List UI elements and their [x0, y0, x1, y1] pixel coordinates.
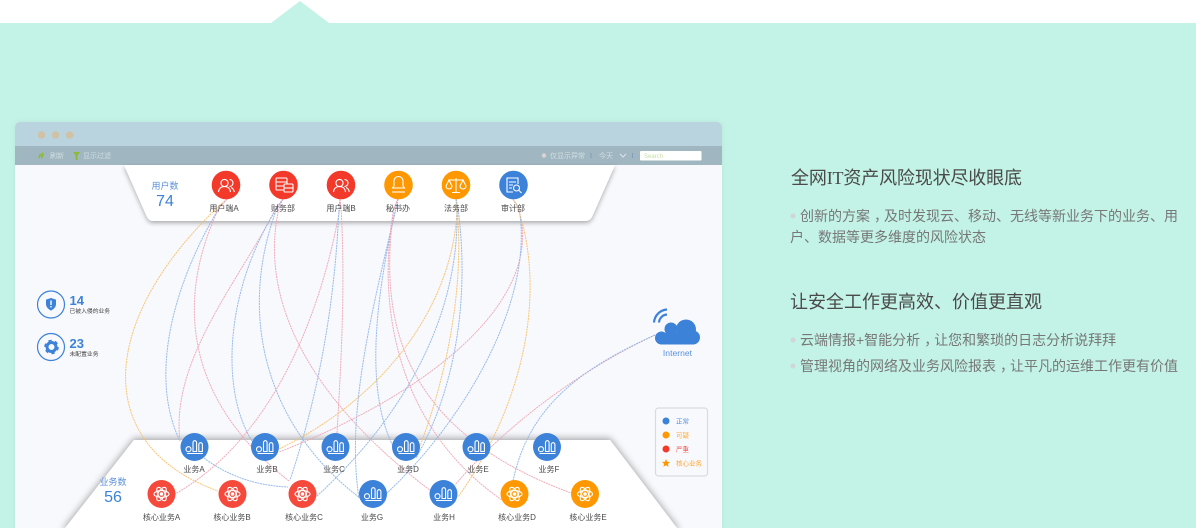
node: 核心业务E: [569, 480, 607, 522]
node: 业务D: 业务D: [397, 464, 419, 474]
node: 业务A: 业务A: [183, 464, 205, 474]
text block: visibility description: [790, 208, 1178, 245]
node: 业务F: 业务F: [539, 464, 560, 474]
window toolbar: [15, 146, 722, 165]
node: 核心业务A: 核心业务A: [143, 512, 181, 522]
heading: full-network visibility: 全网IT资产风险现状尽收眼底: [791, 168, 1022, 188]
icon: internet cloud: [654, 310, 700, 358]
node: 秘书办: [384, 171, 413, 213]
node: 业务A: [180, 433, 208, 474]
node: 法务部: [442, 171, 470, 213]
node: 业务B: [251, 433, 279, 474]
node: 秘书办: 秘书办: [386, 203, 410, 213]
node: 业务C: 业务C: [323, 464, 345, 474]
stat: unconfigured businesses: [38, 334, 99, 360]
node: 业务F: [533, 433, 561, 474]
legend: 正常: [676, 416, 689, 426]
node: 业务G: 业务G: [361, 512, 383, 522]
business count: [99, 476, 127, 506]
business count: 56: [104, 489, 122, 506]
node: 核心业务C: 核心业务C: [285, 512, 323, 522]
node: 核心业务A: [143, 480, 181, 522]
node: 用户端B: 用户端B: [326, 203, 356, 213]
text block: visibility description: 创新的方案 ，及时发现云、移动、无线等新业务下的业务、用: [800, 208, 1178, 224]
panel: user departments: [124, 165, 615, 221]
toolbar right actions: [542, 151, 702, 160]
stat: compromised businesses: 已被入侵的业务: [70, 307, 110, 315]
toolbar left actions: 显示过滤: [83, 151, 111, 160]
legend: [656, 408, 708, 476]
node: 核心业务B: 核心业务B: [213, 512, 251, 522]
node: 业务C: [322, 433, 350, 474]
text block: visibility description: 户、数据等更多维度的风险状态: [790, 229, 986, 245]
heading: efficiency and value: 让安全工作更高效、价值更直观: [790, 292, 1042, 312]
user count: [151, 180, 179, 210]
node: 审计部: 审计部: [501, 203, 525, 213]
node: 业务E: [462, 433, 490, 474]
node: 核心业务C: [285, 480, 323, 522]
node: 审计部: [499, 171, 528, 213]
stat: unconfigured businesses: 23: [70, 336, 84, 351]
node: 业务E: 业务E: [467, 464, 489, 474]
toolbar left actions: 刷新: [50, 151, 64, 160]
node: 业务H: 业务H: [433, 512, 455, 522]
stat: unconfigured businesses: 未配置业务: [70, 350, 99, 358]
icon: internet cloud: Internet: [663, 348, 693, 358]
node: 业务B: 业务B: [256, 464, 278, 474]
connection lines: [126, 199, 655, 500]
node: 核心业务D: 核心业务D: [498, 512, 536, 522]
user count: 用户数: [151, 180, 179, 191]
text block: efficiency bullets: 云端情报+智能分析 ，让您和繁琐的日志分析说拜拜: [800, 332, 1116, 348]
node: 用户端A: [209, 171, 240, 213]
node: 用户端A: 用户端A: [209, 203, 239, 213]
business count: 业务数: [99, 476, 127, 487]
node: 法务部: 法务部: [444, 203, 468, 213]
toolbar right actions: 仅显示异常: [550, 151, 585, 160]
node: 业务D: [392, 433, 420, 474]
node: 财务部: 财务部: [271, 203, 295, 213]
pointer triangle: [271, 1, 329, 23]
window title bar: [15, 122, 722, 146]
legend: 严重: [676, 446, 690, 454]
node: 用户端B: [326, 171, 356, 213]
window control dots: [38, 131, 73, 139]
node: 核心业务D: [498, 480, 536, 522]
toolbar right actions: 今天: [599, 151, 613, 160]
legend: 核心业务: [676, 458, 702, 468]
panel: browser window: [15, 122, 722, 528]
node: 业务G: [359, 480, 387, 522]
legend: 可疑: [676, 430, 690, 440]
node: 业务H: [430, 480, 458, 522]
stat: compromised businesses: 14: [70, 293, 85, 308]
stat: compromised businesses: [38, 291, 110, 318]
text block: efficiency bullets: 管理视角的网络及业务风险报表 ，让平凡的运维工作更有价值: [800, 358, 1178, 374]
node: 核心业务E: 核心业务E: [569, 512, 607, 522]
text block: efficiency bullets: [790, 332, 1178, 374]
toolbar right actions: Search: [644, 154, 663, 160]
toolbar left actions: [38, 151, 111, 160]
panel: business list: [62, 440, 680, 528]
node: 核心业务B: [213, 480, 251, 522]
user count: 74: [156, 193, 174, 210]
node: 财务部: [269, 171, 298, 213]
